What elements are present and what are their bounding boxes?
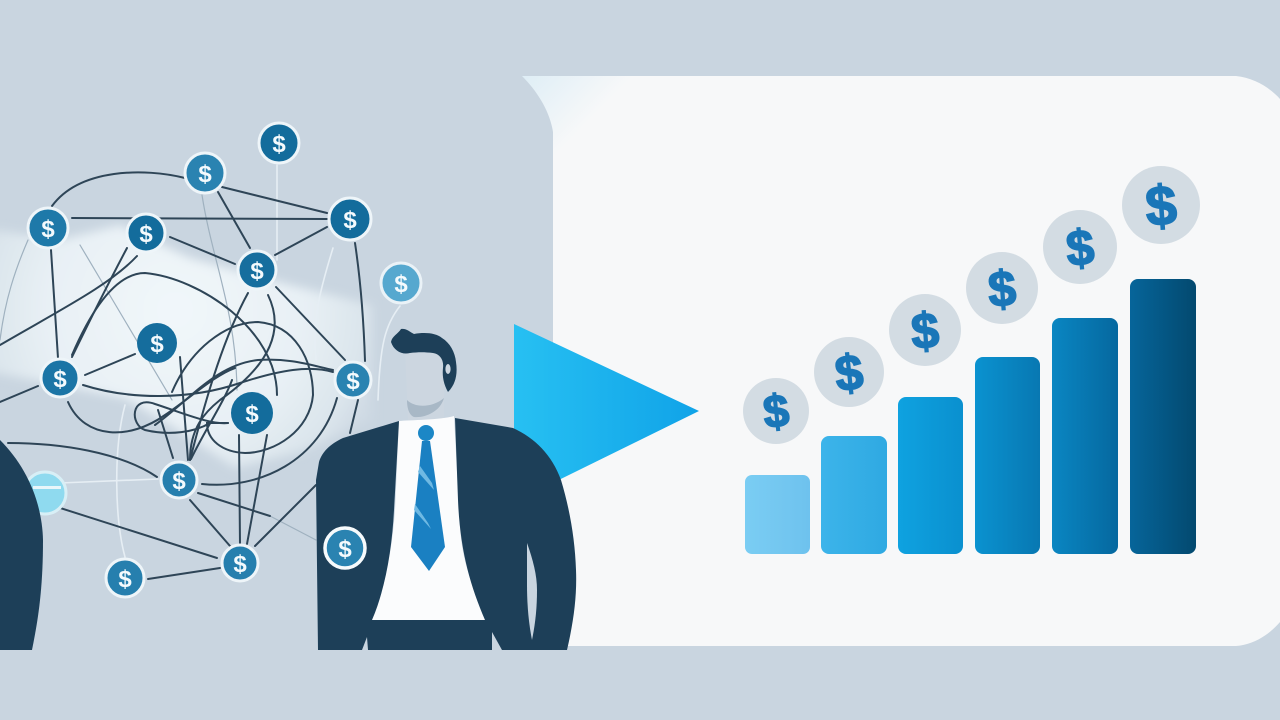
coin 6 — [1122, 166, 1200, 244]
node — [329, 198, 371, 240]
node: $ — [139, 221, 153, 248]
node — [238, 251, 276, 289]
node: $ — [198, 161, 212, 188]
coin 3 — [889, 294, 961, 366]
node: $ — [118, 566, 132, 593]
network: dollar nodes — [24, 123, 421, 597]
coin 5 — [1043, 210, 1117, 284]
bar 4 — [975, 357, 1040, 554]
bar 2 — [821, 436, 887, 554]
bar 3 — [898, 397, 963, 554]
node: $ — [250, 258, 264, 285]
node: $ — [272, 131, 286, 158]
coin 2 — [814, 337, 884, 407]
coin 5: $ — [1064, 219, 1097, 277]
face and neck — [405, 350, 444, 420]
node: $ — [41, 216, 55, 243]
ear — [445, 364, 451, 374]
coin 4: $ — [986, 260, 1018, 318]
coins: dollar coins above bars — [743, 166, 1200, 444]
bar 1 — [745, 475, 810, 554]
node: $ — [233, 551, 247, 578]
badge: dollar on sleeve — [325, 528, 365, 568]
neck shadow — [407, 398, 444, 417]
coin 4 — [966, 252, 1038, 324]
coin 3: $ — [909, 302, 941, 360]
node: $ — [394, 271, 408, 298]
node — [381, 263, 421, 303]
bar 6 — [1130, 279, 1196, 554]
node: $ — [150, 331, 164, 358]
bar 5 — [1052, 318, 1118, 554]
network connection lines — [0, 165, 400, 579]
panel: white result panel — [522, 76, 1280, 646]
node: $ — [346, 368, 360, 395]
coin 2: $ — [832, 344, 866, 402]
node: $ — [172, 468, 186, 495]
node — [106, 559, 144, 597]
node — [231, 392, 273, 434]
hair — [391, 329, 457, 392]
arrow: blue triangle pointing to chart — [514, 324, 699, 502]
node — [41, 359, 79, 397]
coin 1: $ — [761, 384, 791, 438]
light haze behind network — [0, 225, 372, 468]
node — [259, 123, 299, 163]
person: businessman — [316, 329, 576, 650]
node — [161, 462, 197, 498]
node: $ — [343, 207, 357, 234]
node: $ — [245, 401, 259, 428]
node — [127, 214, 165, 252]
node — [28, 208, 68, 248]
necktie — [411, 425, 445, 571]
node — [137, 323, 177, 363]
chart: rising bars — [745, 279, 1196, 554]
node — [335, 362, 371, 398]
jacket — [316, 418, 576, 650]
node — [185, 153, 225, 193]
node — [222, 545, 258, 581]
sleeve gap — [527, 543, 537, 640]
white shirt — [370, 416, 490, 624]
badge: dollar on sleeve: $ — [338, 536, 352, 563]
coin 1 — [743, 378, 809, 444]
node: $ — [53, 366, 67, 393]
person: left partial figure — [0, 440, 43, 650]
node: faded — [24, 472, 66, 514]
coin 6: $ — [1143, 173, 1179, 238]
